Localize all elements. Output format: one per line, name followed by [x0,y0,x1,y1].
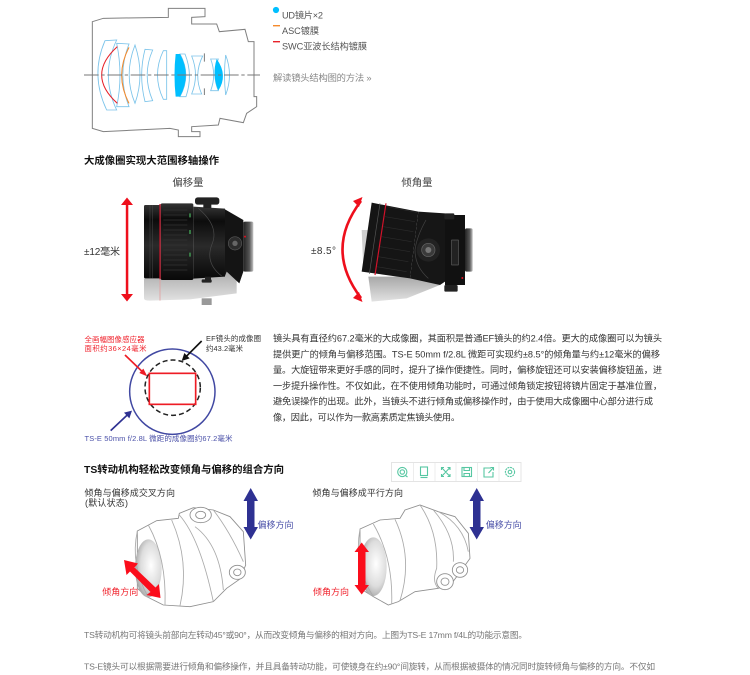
icon: document [420,467,428,478]
optical axis [84,73,260,76]
footer paragraph 1: TS转动机构可将镜头前部向左转动45°或90°，从而改变倾角与偏移的相对方向。上图为TS-E 17mm f/4L的功能示意图。 [84,629,527,640]
icon: expand [442,468,450,476]
legend [273,7,367,51]
TS-E image circle [130,349,215,434]
tilt lens photo [362,203,473,302]
paragraph: image circle description: 提供更广的倾角与偏移范围。TS-E 50mm f/2.8L 微距可实现约±8.5°的倾角量与约±12毫米的偏移 [273,348,660,360]
lens elements [98,40,229,110]
paragraph: image circle description: 一步提升操作性。不仅如此，在不使用倾角功能时，可通过倾角锁定按钮将镜片固定于基准位置， [273,380,662,391]
paragraph: image circle description: 镜头具有直径约67.2毫米的大成像圈，其面积是普通EF镜头的约2.4倍。更大的成像圈可以为镜头 [273,332,662,344]
sensor label: 全画幅图像感应器 [84,335,145,344]
heading: large image circle: 大成像圈实现大范围移轴操作 [84,154,220,167]
caption: cross direction [84,487,175,508]
icon: share [484,468,494,477]
shift direction arrow: left [244,488,258,540]
tilt direction arrow: left [124,560,160,598]
image circle diagram [111,341,215,434]
legend: SWC line [273,41,280,42]
link: how to read diagram: 解读镜头结构图的方法 » [273,72,372,83]
icon: settings [505,467,515,477]
shift value: ±12毫米 [84,245,120,258]
line drawing: parallel configuration [358,505,470,605]
lens housing outline [92,8,257,137]
legend label: SWC: SWC亚波长结构镀膜 [282,40,367,52]
red arrow [125,355,147,376]
legend label: UD: UD镜片×2 [282,10,323,20]
caption: cross direction: 倾角与偏移成交叉方向 [84,487,175,498]
shift direction label: left: 偏移方向 [258,519,294,530]
shift arrow [121,198,133,302]
tilt arrow [342,197,362,302]
label: shift amount: 偏移量 [172,176,204,189]
toolbar [392,462,521,482]
footer paragraph 2: TS-E镜头可以根据需要进行倾角和偏移操作，并且具备转动功能，可使镜身在约±90°间旋转，从而根据被摄体的情况同时旋转倾角与偏移的方向。不仅如 [84,660,655,672]
lens structure diagram [84,8,260,137]
sensor label [84,335,147,353]
paragraph: image circle description: 量。大旋钮带来更好手感的同时，提升了操作便捷性。同时，偏移旋钮还可以安装偏移旋钮盖，进 [273,364,662,375]
caption: parallel direction: 倾角与偏移成平行方向 [312,487,403,498]
shift lens photo [144,197,253,305]
SWC coating curve [102,47,117,103]
full-frame sensor rectangle [149,373,196,404]
caption: cross direction: (默认状态) [85,497,128,508]
paragraph: image circle description: 避免误操作的出现。此外，当镜头不进行倾角或偏移操作时，由于使用大成像圈中心部分进行成 [273,396,653,406]
ASC coating curve [122,47,129,103]
tilt direction label: right: 倾角方向 [313,586,349,597]
black arrow [182,341,202,361]
icon: zoom [398,467,408,477]
EF circle label [206,334,261,353]
label: tilt amount: 倾角量 [401,176,433,189]
TS-E circle label: TS-E 50mm f/2.8L 微距的成像圈约67.2毫米 [84,433,233,443]
legend: ASC line [273,25,280,26]
icon: save [462,468,472,476]
tilt value: ±8.5° [311,246,336,257]
EF image circle [145,360,200,415]
tilt direction label: left: 倾角方向 [102,586,138,597]
legend label: ASC: ASC镀膜 [282,25,319,36]
legend: UD lens [273,7,279,13]
sensor label: 面积约36×24毫米 [84,344,147,353]
paragraph: image circle description: 像，因此，可以作为一款高素质定焦镜头使用。 [273,412,460,422]
EF circle label: EF镜头的成像圈 [206,334,261,343]
line drawing: cross configuration [135,507,246,607]
shift direction label: right: 偏移方向 [486,519,522,530]
EF circle label: 约43.2毫米 [206,344,244,353]
heading: TS rotation: TS转动机构轻松改变倾角与偏移的组合方向 [84,463,284,476]
blue arrow [111,411,132,431]
shift direction arrow: right [470,488,484,540]
paragraph: image circle description [273,332,662,422]
tilt direction arrow: right [354,542,369,594]
